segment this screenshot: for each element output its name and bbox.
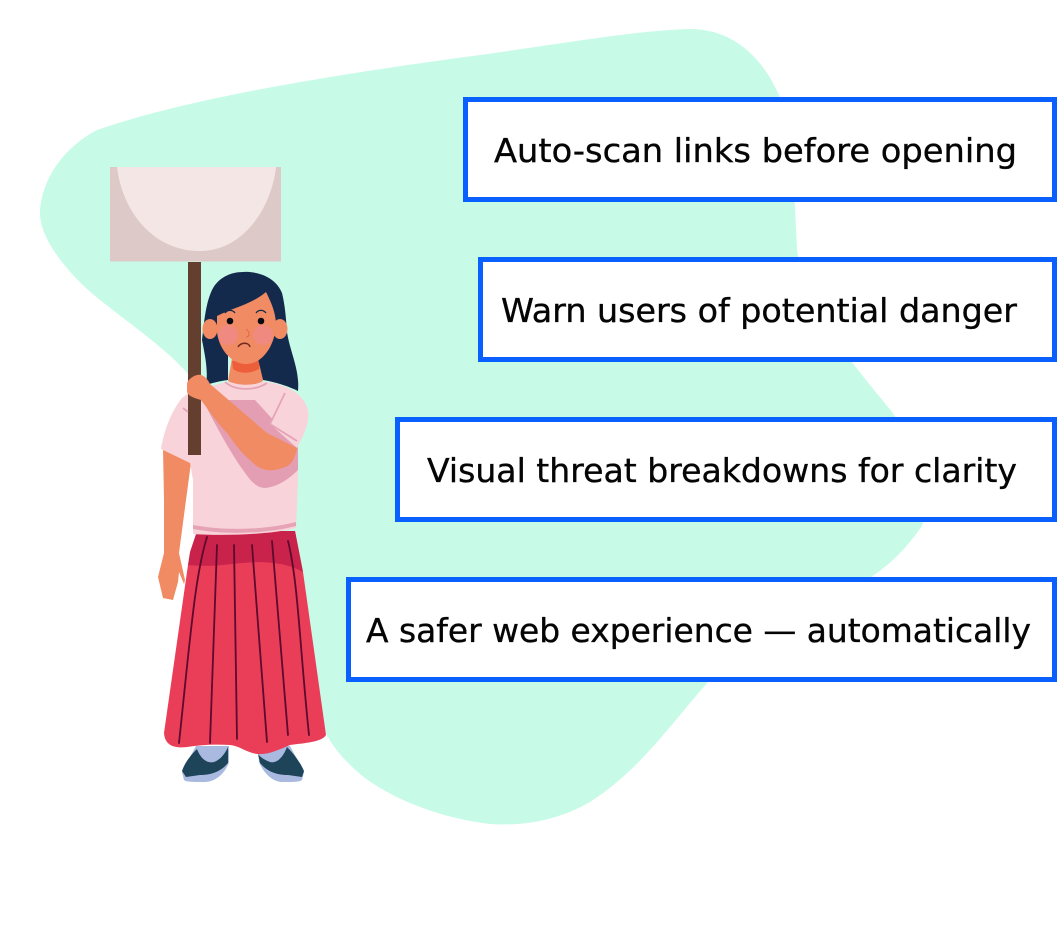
skirt bbox=[164, 531, 326, 754]
box 2: warn users: Warn users of potential danger bbox=[501, 291, 1017, 330]
box 4: safer web experience: A safer web experience — automatically bbox=[366, 611, 1031, 650]
box 1: auto-scan links bbox=[466, 100, 1054, 200]
box 1: auto-scan links: Auto-scan links before opening bbox=[494, 131, 1017, 170]
sign pole bbox=[188, 262, 201, 455]
box 4: safer web experience bbox=[348, 580, 1054, 680]
figure: woman holding sign bbox=[110, 167, 326, 782]
background mint blob bbox=[40, 29, 924, 824]
box 2: warn users bbox=[480, 260, 1054, 360]
right sleeve bbox=[270, 392, 308, 448]
sign panel bbox=[110, 167, 281, 262]
hair bbox=[202, 272, 298, 391]
face bbox=[202, 292, 288, 364]
box 3: visual threat breakdowns bbox=[398, 420, 1054, 520]
t-shirt bbox=[161, 382, 308, 535]
icon: shoes bbox=[182, 746, 304, 782]
neck bbox=[228, 358, 263, 385]
right arm holding pole bbox=[187, 375, 297, 470]
box 3: visual threat breakdowns: Visual threat breakdowns for clarity bbox=[427, 451, 1017, 490]
left arm and hand bbox=[158, 448, 192, 600]
shirt seams bbox=[183, 382, 297, 441]
